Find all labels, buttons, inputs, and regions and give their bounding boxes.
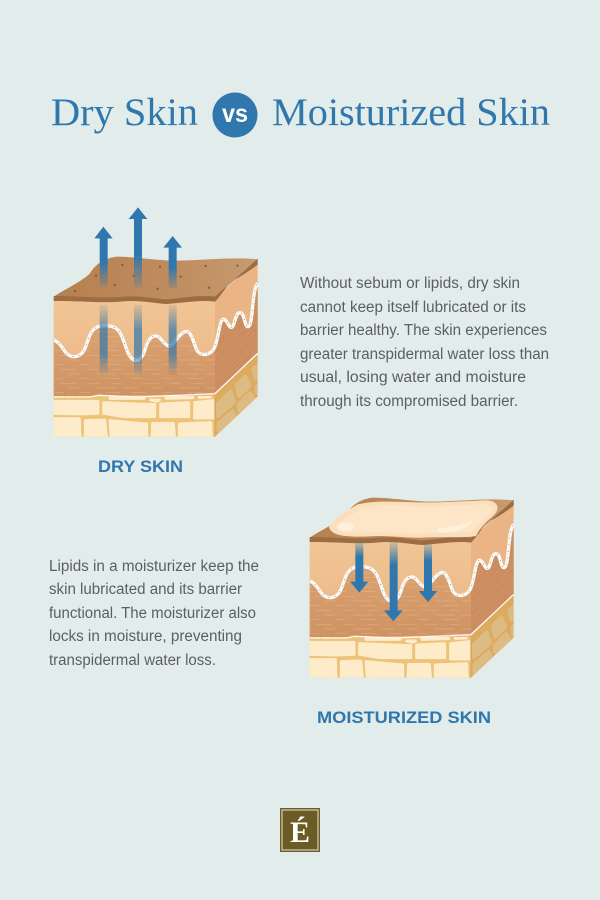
label: dry skin: DRY SKIN xyxy=(98,457,183,476)
text block: moisturized skin description: transpidermal water loss. xyxy=(49,652,216,669)
text block: moisturized skin description xyxy=(49,558,259,669)
arrow: water loss right xyxy=(163,236,182,375)
label: moisturized skin: MOISTURIZED SKIN xyxy=(317,708,491,727)
text block: dry skin description: Without sebum or lipids, dry skin xyxy=(300,275,520,292)
arrow: moisture retained right xyxy=(419,543,437,602)
text block: dry skin description: barrier healthy. The skin experiences xyxy=(300,322,547,339)
skin pores xyxy=(74,264,238,292)
logo: É xyxy=(290,816,310,849)
skin cross-section block xyxy=(309,498,516,679)
text block: dry skin description xyxy=(300,275,549,410)
logo xyxy=(280,808,320,852)
heading: moisturized skin: Moisturized Skin xyxy=(272,91,550,134)
text block: moisturized skin description: Lipids in a moisturizer keep the xyxy=(49,558,259,575)
panel: moisturized skin diagram xyxy=(309,498,516,679)
text block: dry skin description: usual, losing water and moisture xyxy=(300,369,526,386)
text block: dry skin description: greater transpidermal water loss than xyxy=(300,346,549,363)
arrow: water loss left xyxy=(94,227,113,375)
text block: moisturized skin description: skin lubricated and its barrier xyxy=(49,581,242,598)
skin cross-section block xyxy=(53,257,260,438)
text block: dry skin description: cannot keep itself lubricated or its xyxy=(300,299,526,316)
arrow: moisture retained centre xyxy=(384,541,403,621)
panel: dry skin diagram xyxy=(53,207,260,438)
text block: moisturized skin description: functional. The moisturizer also xyxy=(49,605,256,622)
arrow: moisture retained left xyxy=(350,541,368,593)
text block: moisturized skin description: locks in moisture, preventing xyxy=(49,628,242,645)
title xyxy=(51,91,550,138)
vs badge: vs xyxy=(222,100,248,128)
heading: dry skin: Dry Skin xyxy=(51,91,198,134)
arrow: water loss centre xyxy=(129,207,147,375)
moisturizer layer xyxy=(329,500,498,538)
vs badge xyxy=(212,92,258,138)
text block: dry skin description: through its compromised barrier. xyxy=(300,393,518,410)
